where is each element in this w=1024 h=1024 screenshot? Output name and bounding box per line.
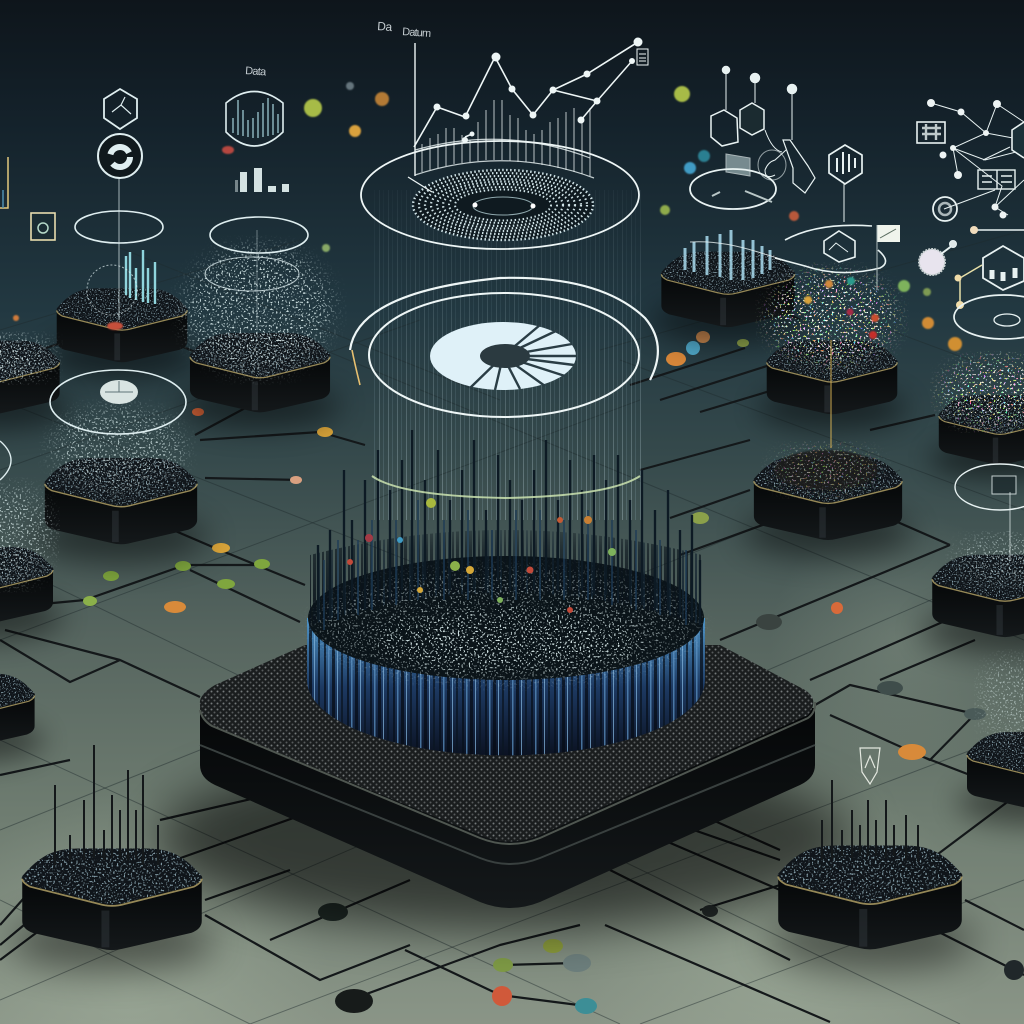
circuit traces: [0, 295, 1024, 1022]
label: Da: Da: [377, 19, 393, 34]
chart hologram stack: [350, 38, 658, 498]
dense spike curtain: [310, 530, 702, 625]
cylinder particles: [347, 498, 616, 613]
floating coloured particles: [13, 82, 962, 351]
area spikes: [415, 100, 590, 176]
left dome hologram: [50, 370, 186, 434]
white flag panel: [877, 225, 900, 290]
icon: open book panel: [978, 170, 1015, 189]
left hologram column: [0, 89, 308, 480]
icon: white ring node: [919, 240, 956, 275]
bar hologram on box: [685, 230, 770, 280]
white bar hologram: [235, 168, 289, 192]
main data cylinder: [307, 430, 705, 755]
data boxes, middle row: [0, 456, 1024, 825]
icon: ring chart: [98, 134, 142, 178]
right hologram icons: [685, 66, 1024, 560]
icon: hexagon: [104, 89, 137, 129]
icon: framed table: [917, 122, 945, 143]
icon: right edge hexagon: [1012, 122, 1024, 158]
icon: hexagon cluster: [711, 66, 815, 193]
left edge bar icon: [0, 157, 8, 208]
grid panel: [726, 154, 750, 176]
icon: concentric ring: [933, 197, 957, 221]
icon: small framed picture: [31, 213, 55, 240]
icon: hexagon label: [860, 748, 880, 784]
front right box with spikes: [765, 780, 975, 971]
icon: shield chart: [226, 92, 283, 146]
front left box with spikes: [9, 745, 215, 971]
middle ring with pie: [350, 278, 658, 417]
spikes: [318, 430, 700, 625]
speckle clouds rising from boxes: [0, 248, 1024, 742]
network diagram: [927, 99, 1024, 218]
icon: hexagon with bars: [829, 145, 862, 184]
top ring with dotted disc: [361, 141, 639, 249]
floor nodes: [83, 331, 1024, 1014]
data ellipse with hexagon: [775, 225, 886, 273]
lower halo ring: [372, 476, 640, 498]
line chart: [408, 38, 648, 192]
data boxes, back row: [0, 252, 1024, 479]
icon: hexagon with bars right: [983, 246, 1024, 290]
label: Datum: Datum: [402, 26, 432, 40]
central hologram lines: [372, 190, 642, 520]
data boxes, front row: [9, 745, 975, 971]
main platform: [155, 645, 855, 930]
bar hologram: [126, 250, 155, 304]
label: Data: Data: [245, 65, 267, 79]
icon: small chart document: [637, 49, 648, 65]
lower right ellipse: [955, 464, 1024, 510]
